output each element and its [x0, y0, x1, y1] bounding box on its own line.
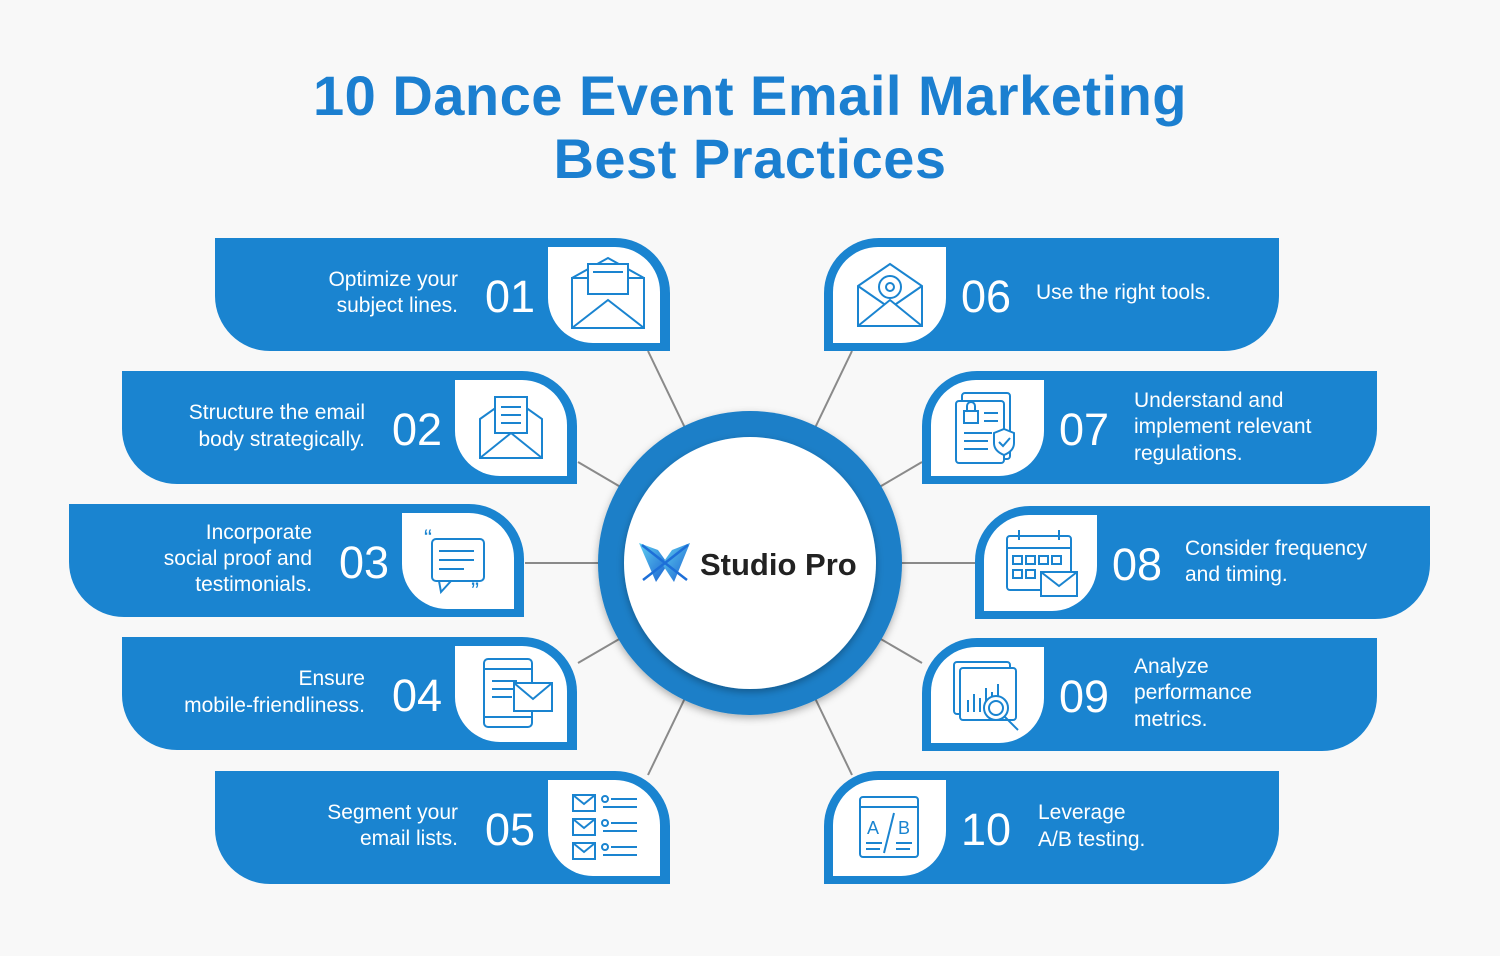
- card 07: regulations.: [1134, 442, 1243, 465]
- card 01: subject lines.: [337, 294, 458, 317]
- card 02: 02: [392, 404, 442, 455]
- card 10: 10: [961, 804, 1011, 855]
- icon: testimonial bubble: ”: [471, 578, 479, 605]
- card 10: A/B testing.: [1038, 828, 1145, 851]
- card 04: Ensure: [298, 667, 365, 690]
- icon: document lock shield: [956, 393, 1014, 463]
- card 07: [922, 371, 1377, 484]
- icon: segmented list: [573, 795, 637, 859]
- center circle logo: [598, 411, 902, 715]
- connector lines: [525, 351, 975, 775]
- card 03: social proof and: [164, 547, 312, 570]
- card 03: 03: [339, 537, 389, 588]
- card 08: [975, 506, 1430, 619]
- icon: letter envelope: [480, 397, 542, 458]
- icon: A/B test window: [860, 797, 918, 857]
- title: Best Practices: [553, 127, 947, 190]
- card 01: Optimize your: [328, 268, 458, 291]
- card 02: [122, 371, 577, 484]
- card 02: body strategically.: [198, 428, 365, 451]
- card 01: [215, 238, 670, 351]
- icon: testimonial bubble: [424, 525, 484, 605]
- icon: logo butterfly: [639, 543, 690, 582]
- card 05: 05: [485, 804, 535, 855]
- card 04: 04: [392, 670, 442, 721]
- card 05: Segment your: [327, 801, 458, 824]
- card 09: [922, 638, 1377, 751]
- card 01: 01: [485, 271, 535, 322]
- card 03: Incorporate: [206, 521, 312, 544]
- card 07: Understand and: [1134, 389, 1283, 412]
- card 09: Analyze: [1134, 655, 1209, 678]
- title: 10 Dance Event Email Marketing: [313, 64, 1187, 127]
- icon: mobile with email: [484, 659, 552, 727]
- card 06: [824, 238, 1279, 351]
- icon: A/B test window: A: [867, 818, 879, 838]
- card 05: email lists.: [360, 827, 458, 850]
- card 09: 09: [1059, 671, 1109, 722]
- card 03: testimonials.: [195, 573, 312, 596]
- icon: A/B test window: B: [898, 818, 910, 838]
- card 08: Consider frequency: [1185, 537, 1368, 560]
- card 06: 06: [961, 271, 1011, 322]
- card 05: [215, 771, 670, 884]
- card 10: [824, 771, 1279, 884]
- center circle logo: Studio Pro: [700, 547, 857, 582]
- card 04: [122, 637, 577, 750]
- card 09: metrics.: [1134, 708, 1208, 731]
- card 10: Leverage: [1038, 801, 1126, 824]
- card 03: [69, 504, 524, 617]
- card 02: Structure the email: [189, 401, 365, 424]
- card 06: Use the right tools.: [1036, 281, 1211, 304]
- card 04: mobile-friendliness.: [184, 694, 365, 717]
- card 08: 08: [1112, 539, 1162, 590]
- icon: chart magnifier: [954, 662, 1018, 730]
- icon: testimonial bubble: “: [424, 525, 432, 552]
- title: [313, 64, 1187, 190]
- card 08: and timing.: [1185, 563, 1288, 586]
- card 07: implement relevant: [1134, 415, 1312, 438]
- icon: open envelope: [572, 258, 644, 328]
- card 09: performance: [1134, 681, 1252, 704]
- icon: calendar envelope: [1007, 530, 1077, 596]
- icon: envelope gear: [858, 264, 922, 326]
- card 07: 07: [1059, 404, 1109, 455]
